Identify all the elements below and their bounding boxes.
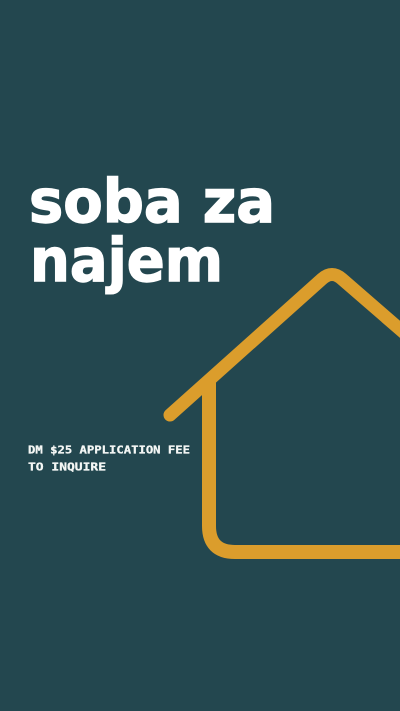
title: soba za — [29, 167, 275, 237]
text block: application fee: TO INQUIRE — [28, 460, 106, 474]
text block: application fee: DM $25 APPLICATION FEE — [28, 444, 190, 456]
text block: application fee — [28, 444, 190, 474]
icon: house outline — [170, 274, 400, 552]
title — [29, 167, 275, 296]
title: najem — [30, 226, 223, 296]
